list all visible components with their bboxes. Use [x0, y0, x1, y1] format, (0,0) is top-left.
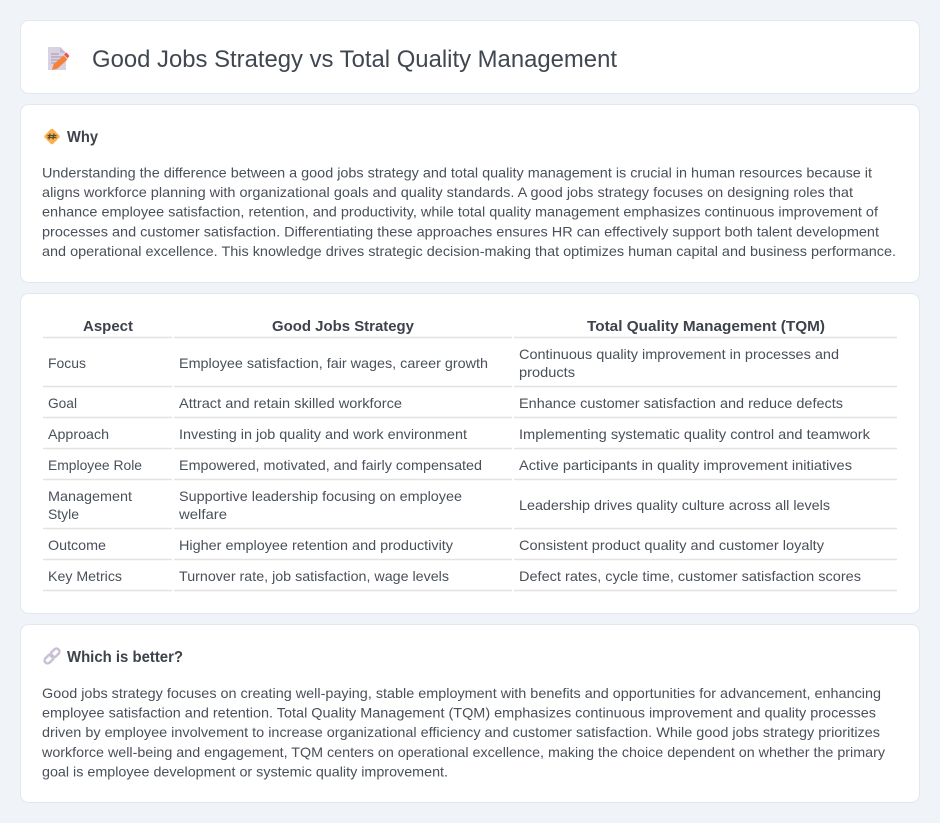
- text block: why: [42, 164, 896, 259]
- row: management style: [48, 488, 830, 522]
- row: management style: Management: [48, 488, 132, 504]
- text block: which is better: workforce well-being and engagement, TQM centers on operational excellence, making the choice dependent on whether the primary: [41, 744, 885, 760]
- row: management style: welfare: [178, 506, 227, 522]
- row: key metrics: Key Metrics: [48, 568, 122, 584]
- row: employee role: Active participants in quality improvement initiatives: [519, 457, 852, 473]
- row: focus: products: [519, 364, 575, 380]
- row: employee role: Employee Role: [48, 457, 142, 473]
- table header row: Total Quality Management (TQM): [587, 318, 825, 335]
- icon: document with pencil: [48, 47, 70, 70]
- table header row: [83, 318, 825, 335]
- row: goal: Attract and retain skilled workforce: [179, 395, 402, 411]
- table header row: Good Jobs Strategy: [272, 318, 415, 335]
- row: goal: [48, 395, 843, 411]
- row: key metrics: Defect rates, cycle time, customer satisfaction scores: [519, 568, 861, 584]
- panel: why: [20, 104, 920, 282]
- row: outcome: Consistent product quality and customer loyalty: [519, 537, 824, 553]
- row: goal: Goal: [48, 395, 77, 411]
- text block: why: processes and customer satisfaction. Differentiating these approaches ensures HR can effectively support both talent development: [42, 223, 879, 239]
- row: outcome: Higher employee retention and productivity: [179, 537, 453, 553]
- row: approach: Approach: [48, 426, 109, 442]
- title: Good Jobs Strategy vs Total Quality Management: [92, 46, 617, 73]
- panel: comparison table: [20, 294, 920, 614]
- row: focus: Continuous quality improvement in processes and: [519, 346, 839, 362]
- table header row: Aspect: [83, 318, 133, 335]
- row: focus: [48, 346, 839, 380]
- row: outcome: [48, 537, 824, 553]
- text block: which is better: goal is employee development or systemic quality improvement.: [42, 763, 448, 779]
- row: key metrics: [48, 568, 861, 584]
- panel: header: [20, 20, 920, 94]
- row: management style: Leadership drives quality culture across all levels: [519, 497, 830, 513]
- text block: why: enhance employee satisfaction, retention, and productivity, while total quality management emphasizes continuous improvement of: [42, 204, 878, 220]
- row: approach: Investing in job quality and work environment: [179, 426, 467, 442]
- row: management style: Style: [48, 506, 79, 522]
- text block: which is better: Good jobs strategy focuses on creating well-paying, stable employment with benefits and opportunities for advancement, enhancing: [42, 685, 881, 701]
- text block: which is better: driven by employee involvement to increase organizational efficiency and customer satisfaction. While good jobs strategy prioritizes: [42, 724, 880, 740]
- row: focus: Focus: [48, 355, 86, 371]
- text block: why: aligns workforce planning with organizational goals and quality standards. A good jobs strategy focuses on designing roles that: [42, 184, 853, 200]
- heading: which is better: Which is better?: [67, 649, 183, 666]
- row: approach: Implementing systematic quality control and teamwork: [519, 426, 871, 442]
- row: outcome: Outcome: [48, 537, 106, 553]
- row: focus: Employee satisfaction, fair wages, career growth: [179, 355, 488, 371]
- row: goal: Enhance customer satisfaction and reduce defects: [519, 395, 843, 411]
- text block: which is better: employee satisfaction and retention. Total Quality Management (TQM) emphasizes continuous improvement and quality processes: [42, 705, 876, 721]
- row: approach: [48, 426, 871, 442]
- heading: why: Why: [67, 129, 98, 146]
- row: key metrics: Turnover rate, job satisfaction, wage levels: [179, 568, 449, 584]
- row: employee role: [48, 457, 852, 473]
- icon: warning diamond: [44, 128, 60, 145]
- panel: which is better: [20, 624, 920, 802]
- text block: which is better: [41, 685, 885, 779]
- icon: chain link: [43, 647, 61, 665]
- text block: why: Understanding the difference between a good jobs strategy and total quality management is crucial in human resources because it: [42, 164, 872, 180]
- text block: why: and operational excellence. This knowledge drives strategic decision-making that optimizes human capital and business performance.: [42, 243, 896, 259]
- row: employee role: Empowered, motivated, and fairly compensated: [179, 457, 482, 473]
- row: management style: Supportive leadership focusing on employee: [179, 488, 462, 504]
